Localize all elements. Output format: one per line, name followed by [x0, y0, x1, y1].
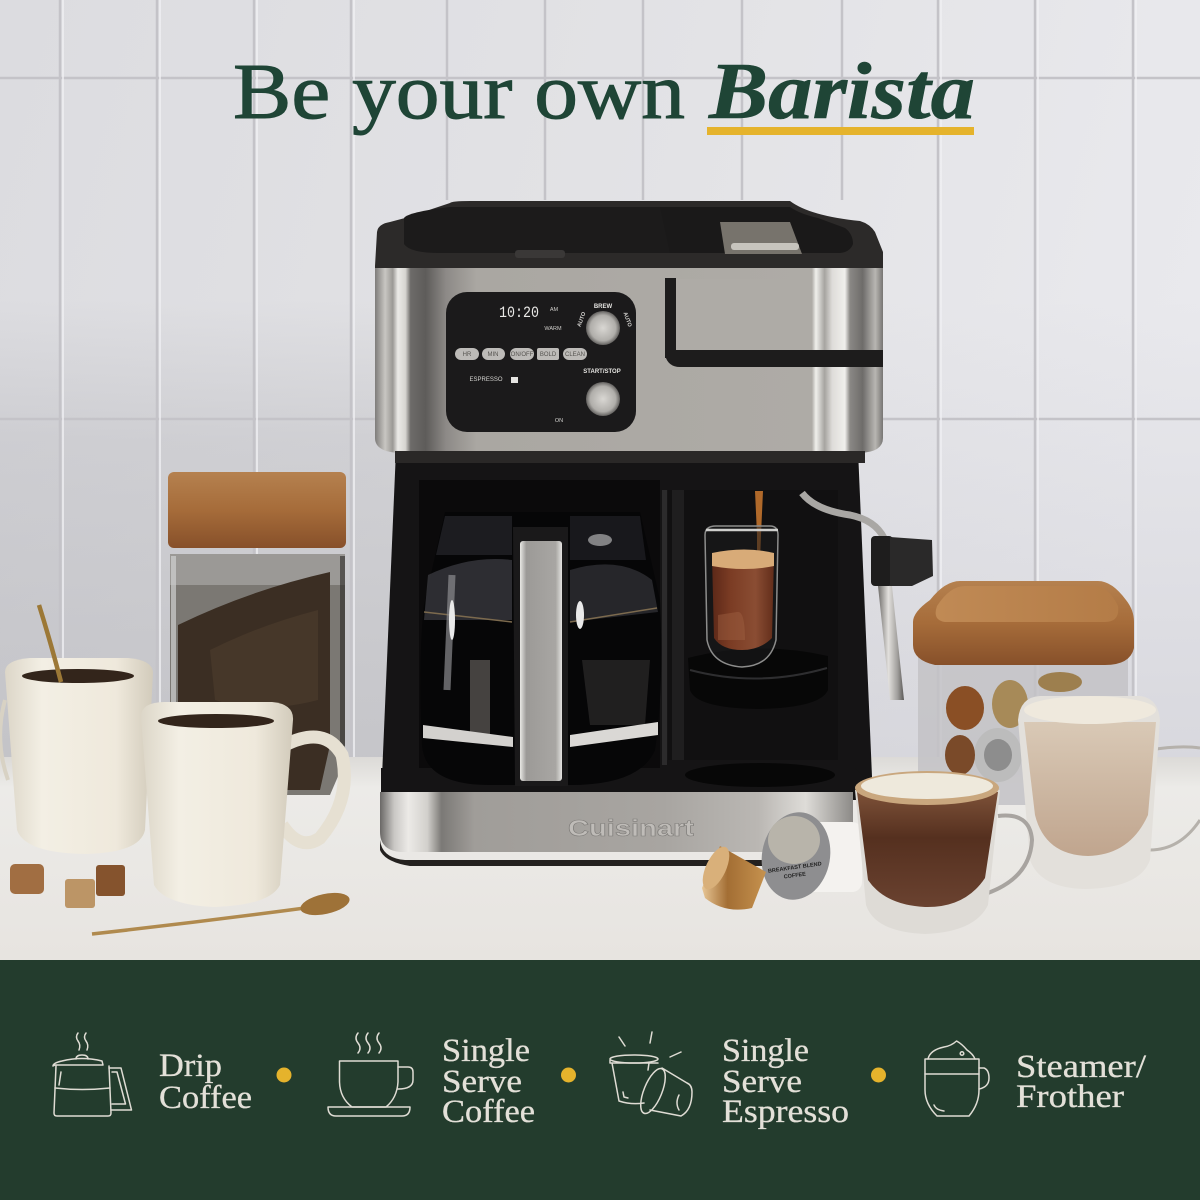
- title: Be your own Barista: Be your own: [233, 49, 685, 136]
- separator dot: [561, 1068, 576, 1082]
- icon: drip coffee pot: [53, 1033, 132, 1116]
- label: Single Serve Espresso: Serve: [722, 1064, 802, 1100]
- gold spoon handle: [39, 605, 61, 682]
- base with Cuisinart logo: Cuisinart: [568, 815, 694, 841]
- white K-cup pod: [755, 807, 862, 905]
- espresso drip tray: [685, 648, 835, 787]
- start stop dial: [586, 382, 620, 416]
- capsules: [945, 672, 1082, 782]
- panel buttons: MIN: [488, 352, 498, 358]
- feature row: [53, 1032, 1147, 1130]
- photo: tiled kitchen wall: [0, 0, 1200, 770]
- drip deck: [381, 768, 872, 797]
- cappuccino glass: [855, 771, 1032, 934]
- title underline: [707, 127, 974, 135]
- panel buttons: HR: [463, 352, 472, 358]
- photo: kitchen counter: [0, 757, 1200, 961]
- panel buttons: [455, 348, 587, 360]
- separator dot: [276, 1068, 292, 1082]
- white K-cup pod: COFFEE: [783, 871, 807, 881]
- control panel: [446, 292, 636, 432]
- wooden lid: [168, 472, 346, 548]
- label: Drip Coffee: Coffee: [159, 1080, 252, 1116]
- stainless front panel: [375, 268, 883, 453]
- control panel: AM: [550, 307, 559, 313]
- clock display: 10:20: [499, 304, 539, 322]
- front white mug: [141, 702, 344, 907]
- panel buttons: ON/OFF: [511, 352, 534, 358]
- title: Be your own Barista: Barista: [708, 48, 975, 136]
- label: Drip Coffee: [159, 1048, 252, 1116]
- reservoir window: [665, 278, 883, 367]
- mug handle: [282, 737, 344, 843]
- carafe handle: [513, 527, 568, 786]
- sugar cubes: [10, 864, 125, 908]
- control panel: START/STOP: [583, 369, 621, 375]
- base with Cuisinart logo: [380, 792, 853, 866]
- panel buttons: CLEAN: [565, 352, 585, 358]
- feature band: [0, 960, 1200, 1200]
- label: Single Serve Coffee: Coffee: [442, 1094, 535, 1130]
- control panel: BREW: [594, 304, 612, 310]
- coffee maker: [375, 201, 933, 866]
- label: Steamer/Frother: [1016, 1049, 1147, 1115]
- icon: steaming cup on saucer: [328, 1033, 413, 1116]
- label: Single Serve Coffee: [442, 1033, 535, 1130]
- control panel: AUTO: [621, 311, 633, 329]
- jar of ground coffee with wooden lid: [168, 472, 346, 795]
- panel buttons: BOLD: [540, 352, 557, 358]
- jar of espresso capsules with wooden lid: [913, 581, 1134, 805]
- espresso stream: [755, 491, 763, 562]
- label: Single Serve Espresso: [722, 1033, 849, 1130]
- brew dial: [586, 311, 620, 345]
- title: Be your own Barista: [233, 48, 975, 136]
- icon: espresso capsules: [610, 1032, 692, 1117]
- wooden lid: [913, 581, 1134, 665]
- control panel: AUTO: [577, 311, 588, 328]
- espresso glass: [705, 526, 778, 667]
- label: Single Serve Coffee: Serve: [442, 1064, 522, 1100]
- icon: frothy mug: [925, 1041, 989, 1116]
- label: Single Serve Espresso: Espresso: [722, 1094, 849, 1130]
- underside strip: [395, 451, 865, 463]
- mug handle hint: [0, 700, 8, 780]
- gold teaspoon: [92, 889, 352, 934]
- gold espresso capsule: [697, 843, 766, 910]
- label: Steamer/Frother: Steamer/: [1016, 1049, 1147, 1085]
- pod label: BREAKFAST BLEND: [768, 861, 822, 875]
- control panel: ESPRESSO: [469, 377, 503, 383]
- latte glass: [1018, 696, 1200, 889]
- lid latch: [720, 222, 802, 254]
- label: Steamer/Frother: Frother: [1016, 1079, 1124, 1115]
- left white mug with spoon: [0, 605, 153, 854]
- glass carafe: [420, 512, 661, 786]
- steam wand: [802, 493, 933, 700]
- control panel: WARM: [544, 326, 562, 332]
- control panel: ON: [555, 418, 563, 424]
- separator dot: [871, 1068, 886, 1082]
- top lid: [375, 201, 883, 268]
- dark lower housing: [381, 450, 873, 800]
- label: Single Serve Espresso: Single: [722, 1033, 809, 1069]
- carafe metal band: [423, 725, 513, 747]
- label: Drip Coffee: Drip: [159, 1048, 222, 1084]
- label: Single Serve Coffee: Single: [442, 1033, 530, 1069]
